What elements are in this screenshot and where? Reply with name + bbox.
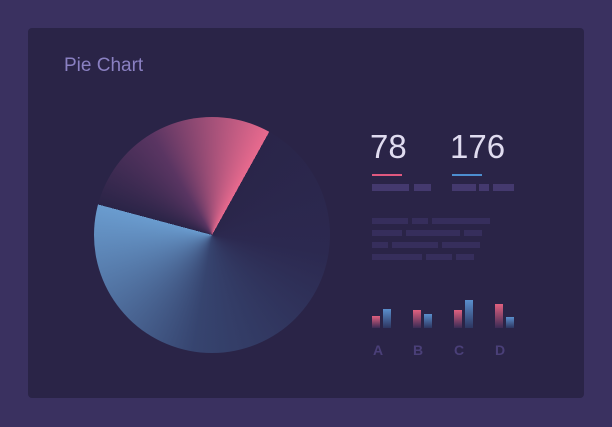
pie chart — [94, 117, 330, 353]
panel — [28, 28, 584, 398]
bar chart — [372, 300, 514, 358]
stat: 78: 78 — [370, 128, 407, 165]
text block placeholder — [372, 218, 490, 260]
stat: 176: 176 — [450, 128, 505, 165]
stat: 176 — [450, 128, 514, 191]
title: Pie Chart — [64, 55, 143, 76]
bar chart: C — [454, 342, 464, 358]
bar chart: B — [413, 342, 423, 358]
stat: 78 — [370, 128, 431, 191]
bar chart: D — [495, 342, 505, 358]
bar chart: A — [373, 342, 383, 358]
